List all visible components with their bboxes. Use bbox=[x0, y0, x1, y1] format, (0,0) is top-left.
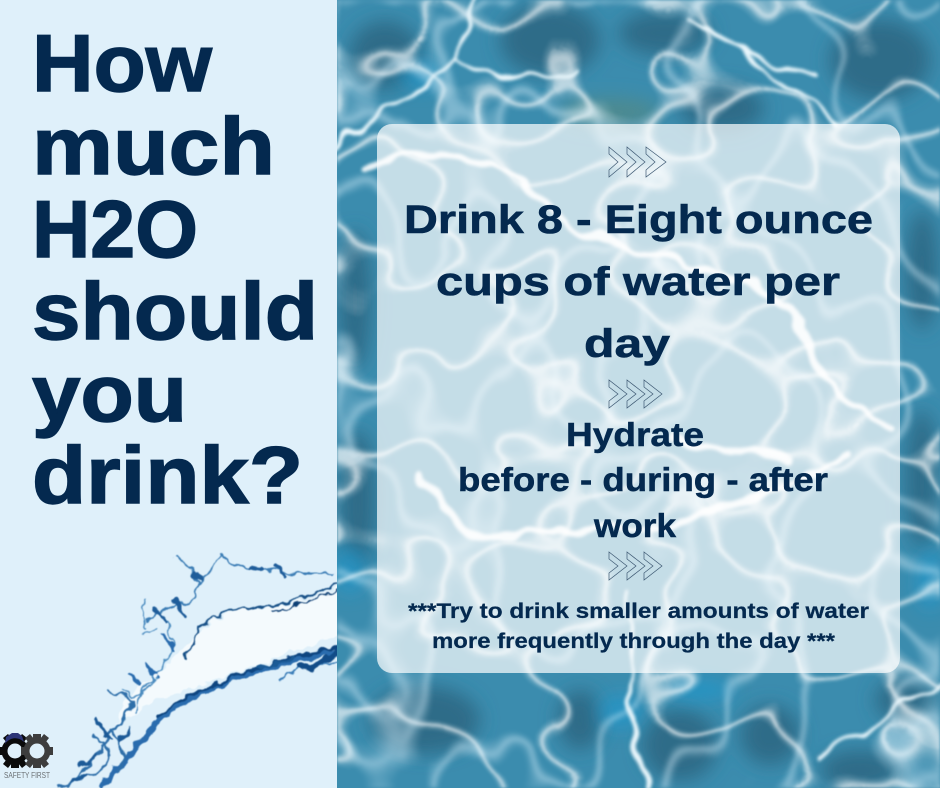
icon: chevrons middle bbox=[609, 380, 662, 408]
icon: right gear bbox=[21, 734, 53, 768]
left panel background bbox=[0, 0, 337, 788]
text: small tip: more frequently through the day *** bbox=[432, 630, 836, 653]
logo text: SAFETY FIRST bbox=[4, 771, 50, 780]
text: main instruction bbox=[404, 198, 873, 366]
text: main instruction: day bbox=[584, 322, 671, 366]
title: much bbox=[32, 102, 275, 192]
title: H2O bbox=[32, 185, 198, 275]
title bbox=[32, 19, 318, 521]
text: small tip: ***Try to drink smaller amounts of water bbox=[408, 600, 869, 623]
text: hydrate instruction: work bbox=[593, 507, 677, 544]
water photo background bbox=[326, 0, 940, 788]
text: hydrate instruction bbox=[458, 416, 828, 544]
title: drink? bbox=[32, 431, 303, 521]
logo: safety first bbox=[0, 733, 53, 780]
title: should bbox=[32, 267, 318, 357]
panel: translucent card bbox=[377, 124, 900, 673]
illustration: water splash bbox=[58, 553, 340, 787]
text: hydrate instruction: before - during - after bbox=[458, 461, 828, 498]
text: main instruction: cups of water per bbox=[436, 260, 840, 304]
text: main instruction: Drink 8 - Eight ounce bbox=[404, 198, 873, 242]
title: you bbox=[32, 349, 187, 439]
title: How bbox=[32, 19, 213, 109]
text: small tip bbox=[408, 600, 869, 653]
icon: left gear bbox=[0, 733, 29, 768]
water caustic highlights bbox=[337, 0, 940, 788]
icon: chevrons bottom bbox=[609, 552, 662, 580]
text: hydrate instruction: Hydrate bbox=[566, 416, 704, 453]
icon: chevrons top bbox=[609, 147, 666, 177]
